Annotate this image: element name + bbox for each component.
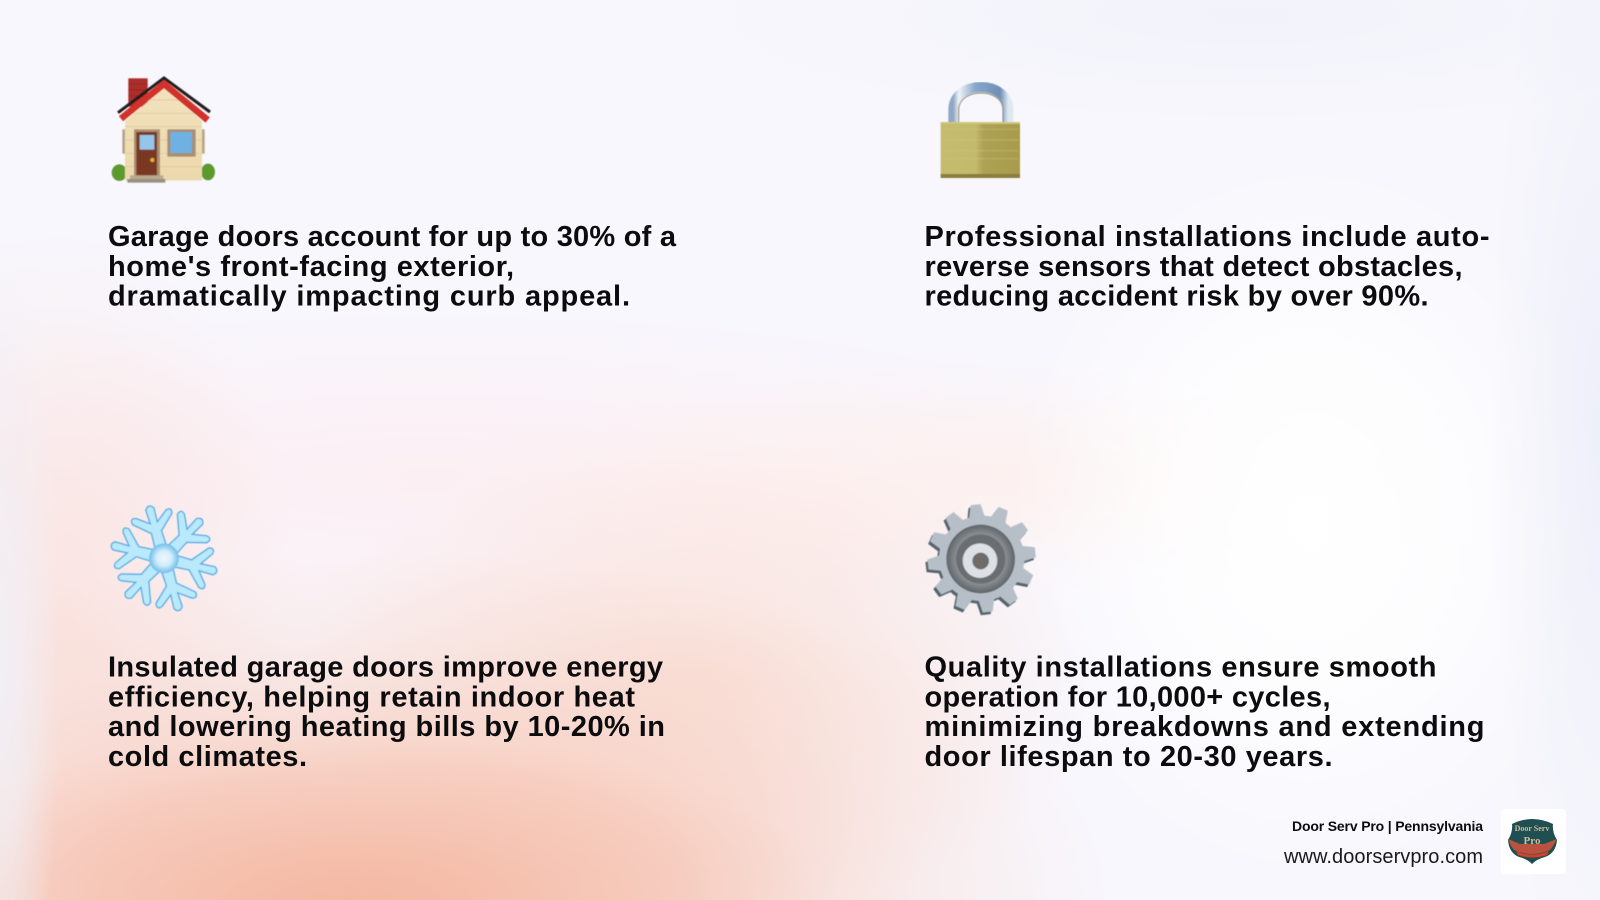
gear teeth (922, 499, 1041, 618)
text: durability: door lifespan to 20-30 years. (924, 741, 1332, 773)
logo badge (1501, 809, 1566, 874)
logo badge: Door Serv (1515, 824, 1549, 833)
text: insulation: and lowering heating bills by 10-20% in (108, 711, 665, 743)
steps (127, 175, 165, 183)
gear shadow (920, 501, 1039, 621)
text: durability: operation for 10,000+ cycles, (924, 681, 1330, 713)
window (167, 129, 196, 157)
roof (118, 78, 210, 120)
icon: snowflake (95, 491, 233, 626)
logo badge: Pro (1524, 835, 1541, 847)
gear rings (946, 525, 1015, 593)
text: curb appeal: dramatically impacting curb appeal. (108, 281, 630, 313)
text: curb appeal: Garage doors account for up to 30% of a (108, 221, 677, 253)
shutters (122, 129, 205, 154)
shackle (953, 87, 1008, 123)
wall (125, 88, 202, 181)
icon: padlock (941, 87, 1020, 178)
chimney (128, 78, 148, 107)
text: insulation: Insulated garage doors improve energy (108, 652, 663, 684)
icon: gear (920, 499, 1041, 621)
text: insulation: efficiency, helping retain indoor heat (108, 681, 635, 713)
text: durability: Quality installations ensure smooth (924, 652, 1436, 684)
door (134, 129, 160, 176)
footer brand name: Door Serv Pro | Pennsylvania (1292, 818, 1483, 834)
text: safety: reducing accident risk by over 90%. (924, 281, 1428, 313)
text: durability: minimizing breakdowns and extending (924, 711, 1484, 743)
text: safety (924, 221, 1490, 313)
text: insulation: cold climates. (108, 741, 307, 773)
text: insulation (108, 652, 665, 773)
text: safety: reverse sensors that detect obstacles, (924, 251, 1462, 283)
icon: house (112, 78, 215, 183)
text: durability (924, 652, 1484, 773)
text: safety: Professional installations include auto- (924, 221, 1490, 253)
footer website: www.doorservpro.com (1283, 846, 1483, 868)
body (941, 122, 1020, 178)
text: curb appeal: home's front-facing exterior, (108, 251, 514, 283)
bushes (112, 164, 215, 181)
text: curb appeal (108, 221, 677, 313)
